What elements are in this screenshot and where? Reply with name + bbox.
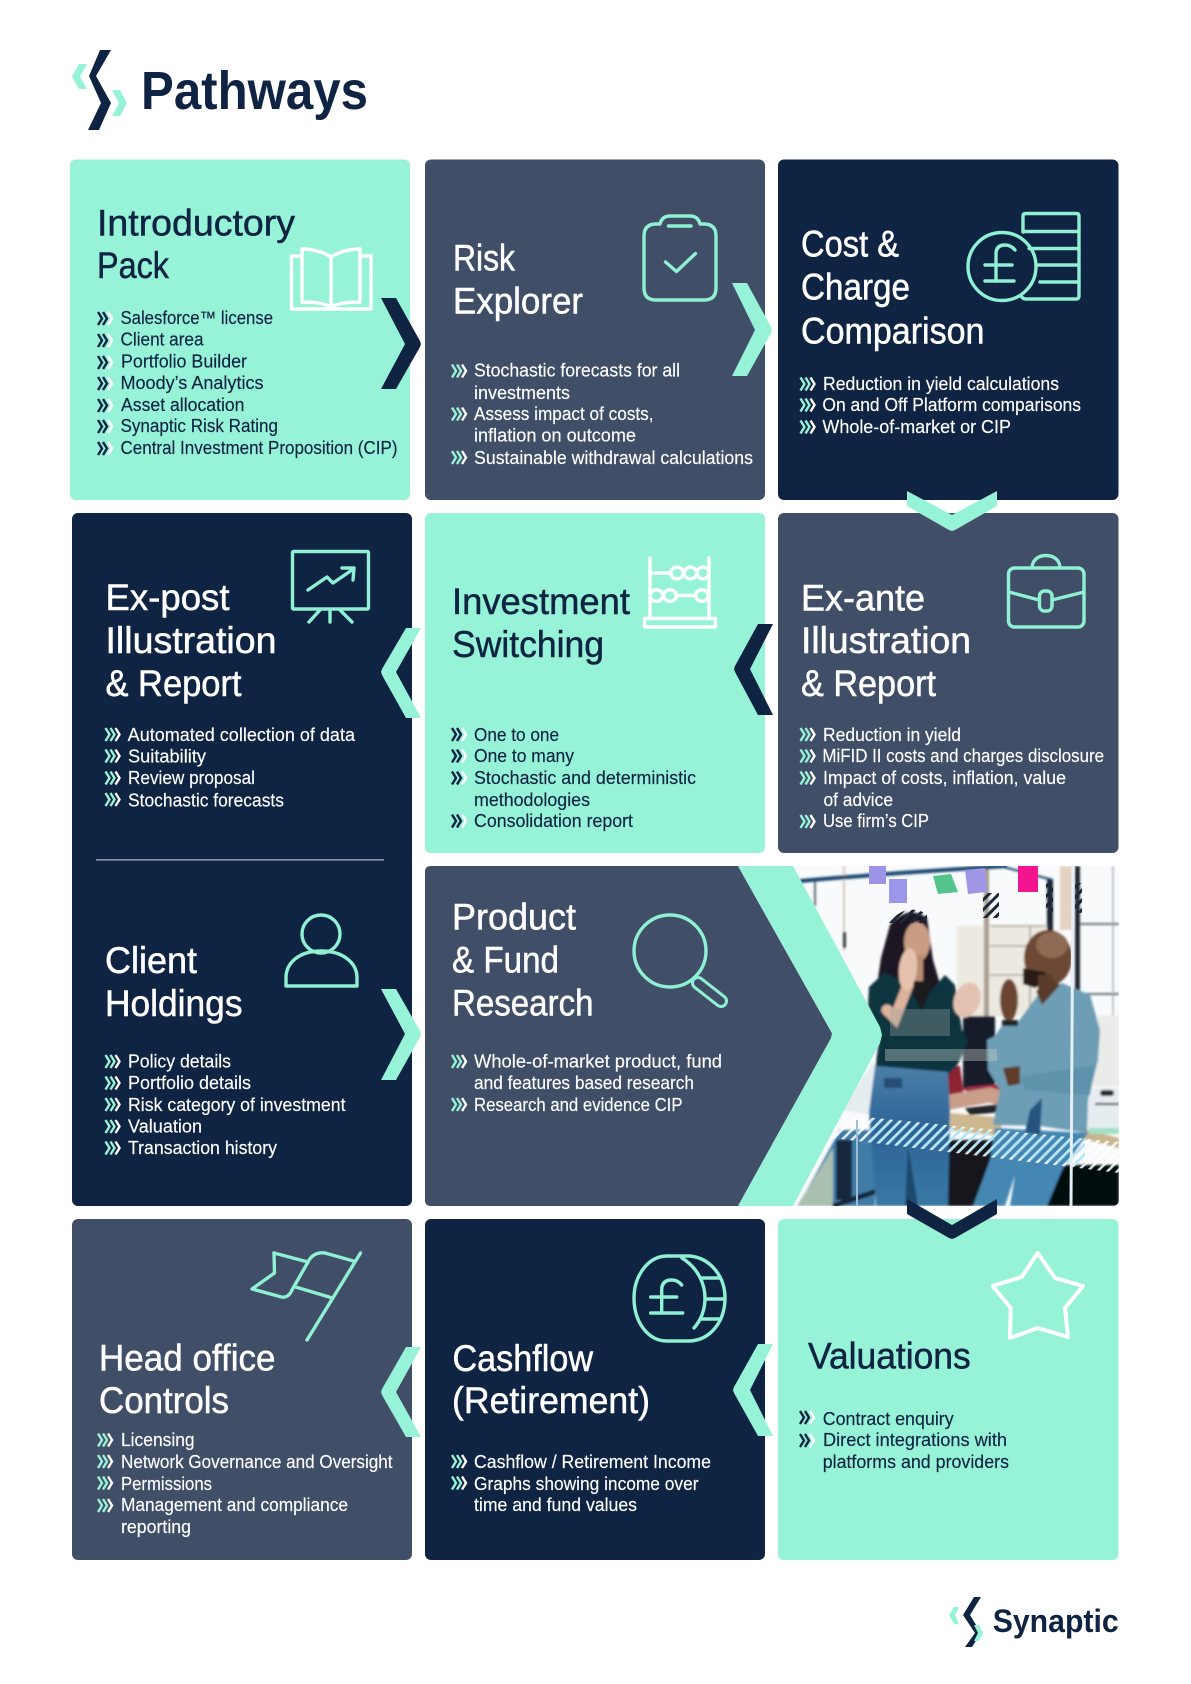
panel: Cost & Charge Comparison [778,160,1118,500]
panel: Cashflow (Retirement) [425,1219,765,1560]
list: MiFID II costs and charges disclosure [822,746,1104,766]
list: Cashflow / Retirement Income [474,1452,711,1472]
list: Client Holdings: Risk category of investment [128,1095,346,1115]
heading: Client Holdings: Client [105,940,198,981]
heading: Investment [452,581,631,622]
list: time and fund values [474,1495,637,1515]
list: Ex-post [106,725,356,810]
list: One to many [474,746,574,766]
list: One to one [474,725,559,745]
list: Client Holdings: Portfolio details [128,1073,251,1093]
heading: Research [452,983,594,1024]
list: Graphs showing income over [474,1474,698,1494]
list: Synaptic Risk Rating [120,416,278,436]
title: Pathways [141,61,368,121]
list: Asset allocation [121,395,244,415]
heading: Charge [801,266,910,308]
list: Assess impact of costs, [474,404,654,424]
list: Reduction in yield [823,725,961,745]
arrow: Product Research down to Valuations [907,1199,997,1239]
arrow: Cashflow to Head office [381,1347,421,1437]
wordmark: Synaptic [993,1603,1119,1639]
heading: Illustration [801,620,971,661]
heading: (Retirement) [452,1380,650,1421]
heading: Client Holdings [105,940,242,1024]
heading: Controls [99,1380,229,1421]
list: inflation on outcome [474,426,636,446]
heading [99,1338,276,1421]
heading: Ex-post [106,577,276,704]
heading: & Report [801,663,937,704]
heading [97,203,296,286]
heading: Ex-post: Ex-post [106,577,230,618]
list: Whole-of-market product, fund [474,1052,722,1072]
heading: Explorer [453,281,583,322]
heading [452,1338,650,1421]
heading: Introductory [97,203,296,244]
list: Client Holdings: Transaction history [128,1138,277,1158]
list [800,725,1104,831]
icon: open book [292,249,371,309]
panel: Product & Fund Research [425,866,882,1206]
panel: Head office Controls [72,1219,412,1560]
icon: Synaptic mark [72,50,127,130]
list: On and Off Platform comparisons [822,395,1081,415]
panel: Introductory Pack [70,160,410,500]
list: Client Holdings: Valuation [128,1116,202,1136]
list: Whole-of-market or CIP [822,417,1011,437]
list [800,374,1081,437]
list: Reduction in yield calculations [823,374,1059,394]
icon: person [286,915,357,986]
heading: Ex-post: Illustration [106,620,276,661]
arrow: Ex-ante to Investment Switching [734,624,773,715]
list: Management and compliance [121,1495,348,1515]
list [452,1052,722,1115]
translucent glass bands [885,1009,997,1061]
arrow: Client Holdings to Product Research [381,989,421,1080]
list: Client Holdings [106,1052,346,1158]
list [800,1409,1009,1472]
heading: Switching [452,624,604,665]
arrow: Valuations to Cashflow [733,1344,773,1436]
icon: briefcase [1008,556,1084,627]
panel: Ex-ante Illustration & Report [778,513,1118,853]
sticky notes [869,864,1038,903]
heading: Head office [99,1338,276,1379]
list: Portfolio Builder [121,352,247,372]
list: Use firm’s CIP [823,811,929,831]
list: Salesforce™ license [120,308,273,328]
panel: Investment Switching [425,513,765,853]
list: Ex-post: Review proposal [128,768,255,788]
arrow: Investment Switching to Ex-post [381,628,421,718]
list: Stochastic forecasts for all [474,361,680,381]
icon: pound coin and table [968,214,1079,300]
panel: Risk Explorer [425,160,765,500]
heading [801,577,971,704]
photo: two colleagues talking in office [796,866,1119,1206]
list [98,1430,392,1537]
arrow: Risk Explorer to Cost & Charge [732,283,772,376]
list: Network Governance and Oversight [121,1452,392,1472]
list: Licensing [121,1430,195,1450]
list: Central Investment Proposition (CIP) [120,438,398,458]
heading: & Fund [452,940,559,981]
heading: Risk [453,238,515,279]
heading: Ex-post: & Report [106,663,242,704]
list: Ex-post: Automated collection of data [128,725,356,745]
icon: pound coin [634,1256,725,1341]
icon: flag [252,1253,360,1340]
icon: presentation board [292,552,368,622]
list: Consolidation report [474,811,633,831]
icon: magnifier [634,915,721,1001]
list: and features based research [474,1073,694,1093]
list: Client Holdings: Policy details [128,1052,231,1072]
list [452,725,696,831]
heading [801,224,984,352]
list: Ex-post: Suitability [128,747,206,767]
list: Impact of costs, inflation, value [823,768,1066,788]
icon: star [993,1253,1083,1338]
list: Research and evidence CIP [474,1095,682,1115]
chevron band [738,866,882,1206]
icon: abacus [644,558,716,627]
list [98,308,398,458]
heading: Comparison [801,311,984,352]
icon: Synaptic mark [949,1597,983,1647]
list: reporting [121,1517,191,1537]
panel: Valuations [778,1219,1118,1560]
heading: Valuations [808,1336,971,1377]
list: Contract enquiry [823,1409,954,1429]
man [987,983,1100,1133]
heading: Cashflow [452,1338,593,1379]
heading: Cost & [801,224,899,265]
list: platforms and providers [823,1452,1009,1472]
list: Permissions [121,1474,212,1494]
header logo: Pathways [72,50,368,130]
arrow: Cost & Charge down to Ex-ante [907,491,997,531]
list: methodologies [474,790,590,810]
list: Client area [120,330,204,350]
list [452,361,753,468]
heading [452,581,631,665]
list [452,1452,711,1515]
heading: Client Holdings: Holdings [105,983,242,1024]
heading [452,897,594,1024]
panel: Ex-post Illustration & Report and Client Holdings [72,513,412,1206]
list: Stochastic and deterministic [474,768,696,788]
heading: Product [452,897,577,938]
heading: Pack [97,245,169,286]
stripes [833,883,1119,1173]
heading: Ex-ante [801,577,925,618]
list: Moody’s Analytics [120,373,264,393]
list: Direct integrations with [823,1430,1007,1450]
list: Sustainable withdrawal calculations [474,448,753,468]
list: investments [474,383,570,403]
icon: clipboard [644,216,716,300]
footer logo: Synaptic [949,1597,1119,1647]
list: of advice [824,790,893,810]
heading [453,238,583,322]
arrow: Introductory Pack to Risk Explorer [381,298,421,389]
list: Ex-post: Stochastic forecasts [128,790,284,810]
woman [876,910,941,995]
